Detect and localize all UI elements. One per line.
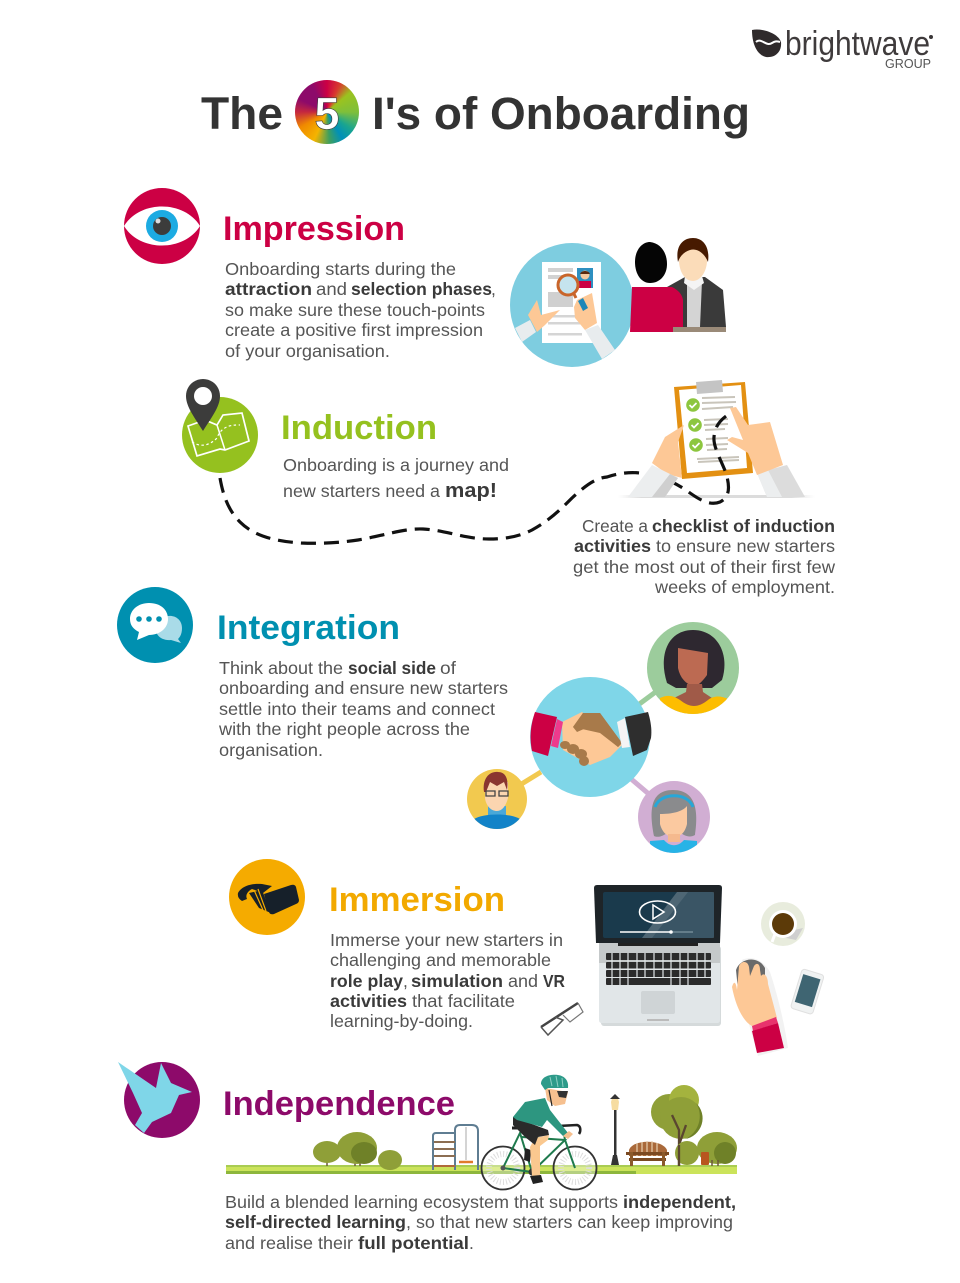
cyclist [513,1075,573,1184]
text: immersion body: VR [543,971,565,991]
heading: immersion: Immersion [329,881,505,919]
title: The [201,88,283,139]
text: independence body: , so that new starters can keep improving [406,1212,733,1232]
panel: integration [117,587,739,860]
text: independence body: . [469,1233,474,1253]
text: impression body: create a positive first impression [225,320,483,340]
arrow: dashed journey path [220,414,729,543]
text: integration body [218,658,508,760]
text: checklist: get the most out of their first few [573,557,835,577]
panel: immersion [229,859,824,1056]
text: checklist: Create a [582,516,648,536]
text: checklist [573,516,835,597]
bicycle [482,1125,596,1190]
illustration: park and cyclist [226,1075,737,1190]
logo: brightwave group [752,25,933,71]
icon: coffee cup [761,902,805,946]
text: induction journey: new starters need a [283,481,440,501]
illustration: CV review [510,243,634,367]
text: immersion body: , [403,971,408,991]
icon: glasses [541,1003,583,1035]
text: integration body: settle into their teams and connect [219,699,495,719]
icon: eye [124,188,200,264]
icon: bird [118,1062,200,1138]
text: checklist: weeks of employment. [654,577,835,597]
text: independence body: full potential [358,1233,469,1253]
text: integration body: of [440,658,456,678]
icon: woman avatar purple [638,781,710,860]
text: integration body: with the right people across the [218,719,470,739]
text: independence body: independent, [623,1192,736,1212]
text: independence body: and realise their [225,1233,353,1253]
icon: rainbow circle with 5 [295,80,359,144]
text: impression body: , [491,279,496,299]
text: integration body: organisation. [219,740,323,760]
text: immersion body [330,930,565,1031]
text: integration body: social side [348,658,436,678]
icon: hand on mouse [732,958,788,1056]
text: induction journey: map! [445,480,497,502]
title: I's of Onboarding [372,88,750,139]
text: immersion body: challenging and memorable [330,950,551,970]
illustration: checklist and hands [618,380,815,498]
illustration: left hand holding clipboard [628,425,684,497]
panel: impression [124,188,726,367]
playground swing and climbing frame [433,1125,478,1170]
heading: induction: Induction [281,409,437,447]
text: impression body: Onboarding starts during the [225,259,456,279]
text: impression body: and [316,279,347,299]
lamp post [610,1094,620,1165]
text: independence body: Build a blended learning ecosystem that supports [225,1192,618,1212]
text: independence body: self-directed learning [225,1212,406,1232]
heading: integration: Integration [217,609,400,647]
icon: smartphone [790,969,824,1015]
icon: chat bubbles [117,587,193,663]
icon: rainbow circle with 5: 5 [314,88,340,139]
heading: independence: Independence [223,1085,455,1123]
logo: brightwave group: GROUP [885,57,931,71]
text: immersion body: learning-by-doing. [330,1011,473,1031]
text: integration body: Think about the [219,658,343,678]
icon: map and pin [182,379,258,473]
icon: handshake [530,677,651,797]
text: immersion body: role play [330,971,403,991]
text: immersion body: that facilitate [412,991,515,1011]
heading: impression: Impression [223,210,405,248]
text: impression body [225,259,496,361]
bench [626,1141,669,1166]
text: induction journey [283,455,509,502]
panel: independence [118,1062,737,1253]
text: immersion body: Immerse your new starters in [330,930,563,950]
text: checklist: activities [574,536,651,556]
text: impression body: selection phases [351,279,492,299]
illustration: interviewers [630,238,726,332]
text: independence body [225,1192,736,1253]
logo: brightwave group: brightwave [785,25,930,63]
text: integration body: onboarding and ensure new starters [219,678,508,698]
panel: induction [182,379,835,597]
text: impression body: of your organisation. [225,341,390,361]
icon: laptop with video [594,885,722,1026]
icon: woman avatar green [647,622,739,716]
text: immersion body: activities [330,991,407,1011]
text: impression body: so make sure these touch-points [225,300,485,320]
text: checklist: to ensure new starters [656,536,835,556]
trees right [651,1085,737,1166]
icon: brightwave wave mark [752,30,781,57]
bushes left [313,1132,402,1170]
text: checklist: checklist of induction [652,516,835,536]
text: induction journey: Onboarding is a journey and [283,455,509,475]
title [201,80,750,144]
ground strip [226,1165,737,1174]
icon: VR headset [229,859,305,935]
illustration: network of people [467,622,739,860]
icon: man avatar yellow [467,769,527,832]
text: impression body: attraction [225,279,312,299]
text: immersion body: and [508,971,538,991]
text: immersion body: simulation [411,971,503,991]
